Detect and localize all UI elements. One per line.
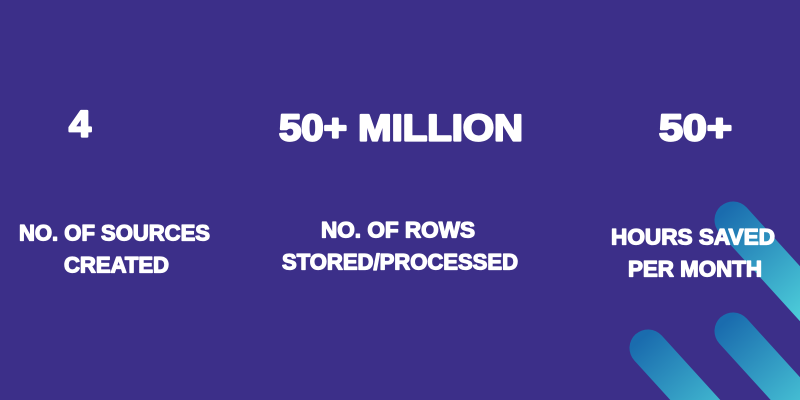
- label: hours saved per month: HOURS SAVED: [611, 224, 775, 250]
- stat: hours: [611, 108, 775, 282]
- value: 50+: 50+: [659, 108, 732, 148]
- label: no. of rows stored/processed: STORED/PROCESSED: [282, 250, 518, 274]
- stat: rows: [279, 108, 523, 274]
- value: 4: 4: [69, 104, 91, 144]
- stat: sources: [19, 104, 210, 278]
- label: hours saved per month: PER MONTH: [628, 256, 762, 282]
- value: 50+ million: 50+ MILLION: [279, 108, 523, 148]
- label: no. of sources created: NO. OF SOURCES: [19, 220, 210, 246]
- label: no. of sources created: CREATED: [64, 252, 169, 278]
- label: no. of rows stored/processed: [282, 218, 518, 274]
- decorative stripes: [629, 201, 800, 400]
- label: hours saved per month: [611, 224, 775, 282]
- label: no. of rows stored/processed: NO. OF ROWS: [321, 218, 475, 242]
- label: no. of sources created: [19, 220, 210, 278]
